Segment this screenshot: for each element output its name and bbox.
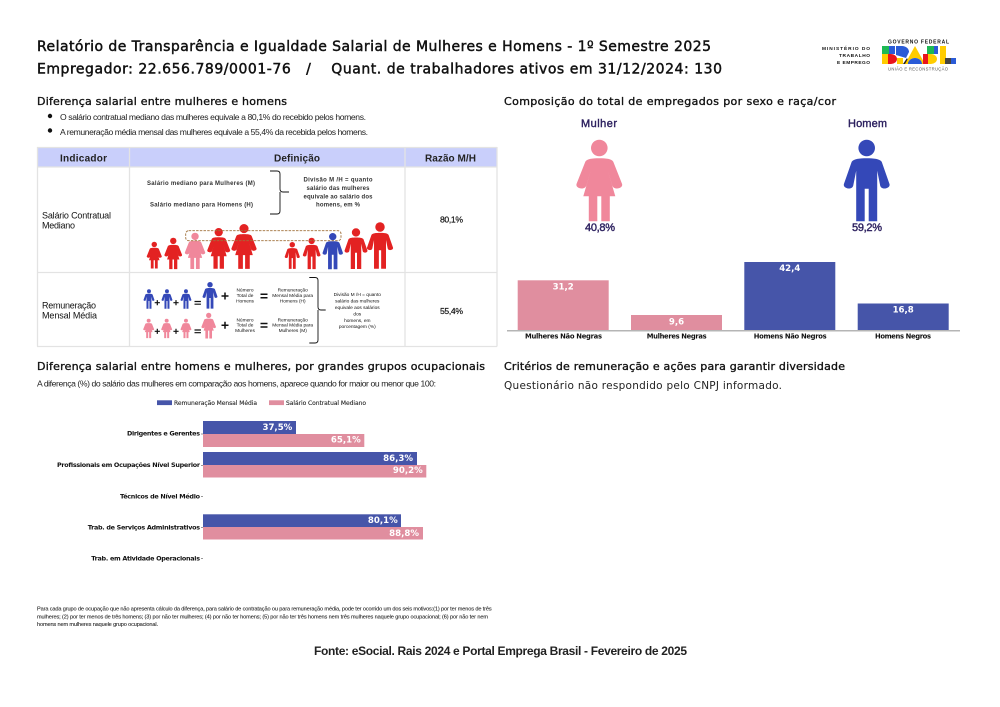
diagram: salário contratual mediano: salário das mulheres bbox=[306, 186, 370, 192]
table: Salário Contratual bbox=[42, 210, 111, 220]
footnote: Para cada grupo de ocupação que não apresenta cálculo da diferença, para salário de contratação ou para remuneração média, pode ter ocorrido um dos seis motivos:(1) por ter menos de três bbox=[37, 606, 492, 612]
heading: diferença salarial: Diferença salarial entre mulheres e homens bbox=[37, 95, 287, 108]
logo: ministério e governo federal: UNIÃO E RECONSTRUÇÃO bbox=[888, 66, 949, 72]
diagram: salário contratual mediano: Divisão M /H = quanto bbox=[304, 178, 373, 184]
bar chart: grupos ocupacionais: 65,1% bbox=[331, 435, 361, 445]
icon: homem 59,2% bbox=[844, 118, 890, 234]
diagram: remuneração mensal média: dos bbox=[353, 311, 362, 317]
logo: ministério e governo federal: MINISTÉRIO DO bbox=[822, 44, 870, 52]
diagram: remuneração mensal média: salário das mulheres bbox=[335, 298, 380, 304]
table: 80,1% bbox=[440, 214, 463, 224]
table: Mediano bbox=[42, 220, 75, 230]
text: explicação: A diferença (%) do salário das mulheres em comparação aos homens, aparece quando for maior ou menor que 100: bbox=[37, 378, 436, 388]
diagram: remuneração mensal média: Divisão M /H = quanto bbox=[334, 292, 381, 298]
bar chart: grupos ocupacionais: 88,8% bbox=[389, 529, 419, 539]
bar chart: sexo e raça/cor: Homens Negros bbox=[875, 332, 931, 340]
diagram: remuneração mensal média: homens, em bbox=[344, 318, 371, 324]
diagram: remuneração mensal média: porcentagem (%) bbox=[339, 324, 376, 330]
bar chart: grupos ocupacionais: Trab. em Atividade Operacionais bbox=[91, 554, 200, 562]
diagram: remuneração mensal média: Mulheres bbox=[235, 328, 255, 334]
table: Mensal Média bbox=[42, 311, 97, 321]
logo: ministério e governo federal bbox=[822, 40, 956, 72]
diagram: salário contratual mediano: equivale ao salário dos bbox=[304, 194, 373, 200]
diagram: remuneração mensal média: Total de bbox=[237, 323, 254, 329]
title: Relatório de Transparência e Igualdade Salarial de Mulheres e Homens - 1º Semestre 2025 bbox=[37, 39, 711, 55]
panel: diferença salarial entre mulheres e homens bbox=[37, 95, 497, 346]
icon: mulher 40,8%: Mulher bbox=[581, 118, 617, 130]
bullet list: A remuneração média mensal das mulheres equivale a 55,4% da recebida pelos homens. bbox=[60, 127, 368, 137]
bar chart: sexo e raça/cor: 42,4 bbox=[779, 264, 800, 274]
legend: Salário Contratual Mediano bbox=[286, 400, 366, 407]
table: Indicador bbox=[60, 154, 107, 164]
logo: ministério e governo federal: TRABALHO bbox=[839, 53, 870, 59]
bar chart: grupos ocupacionais: 86,3% bbox=[383, 454, 413, 464]
diagram: remuneração mensal média: Remuneração bbox=[278, 317, 308, 323]
heading: composição: Composição do total de empregados por sexo e raça/cor bbox=[504, 95, 836, 108]
bar chart: grupos ocupacionais: Técnicos de Nível Médio bbox=[120, 492, 201, 500]
source: Fonte: eSocial. Rais 2024 e Portal Emprega Brasil - Fevereiro de 2025 bbox=[314, 644, 687, 658]
title bbox=[37, 39, 722, 78]
icon: homem 59,2%: 59,2% bbox=[852, 222, 882, 234]
bullet list: O salário contratual mediano das mulheres equivale a 80,1% do recebido pelos homens. bbox=[60, 112, 366, 122]
legend bbox=[157, 400, 366, 407]
bar chart: grupos ocupacionais: 37,5% bbox=[262, 423, 293, 433]
footnote: homens nem mulheres naquele grupo ocupacional. bbox=[37, 622, 158, 628]
table: 55,4% bbox=[440, 306, 463, 316]
heading: critérios: Critérios de remuneração e ações para garantir diversidade bbox=[504, 360, 845, 373]
table: Definição bbox=[274, 154, 320, 164]
table bbox=[37, 147, 497, 346]
panel: composição do total de empregados bbox=[504, 95, 960, 340]
bar chart: sexo e raça/cor: 9,6 bbox=[669, 317, 684, 327]
text: questionário: Questionário não respondido pelo CNPJ informado. bbox=[504, 380, 782, 392]
bar chart: sexo e raça/cor: 16,8 bbox=[893, 306, 914, 316]
icon: mulher 40,8%: 40,8% bbox=[585, 222, 615, 234]
diagram: remuneração mensal média: Remuneração bbox=[278, 287, 308, 293]
diagram: remuneração mensal média: Mensal Média para bbox=[272, 323, 313, 329]
diagram: remuneração mensal média: Mensal Média para bbox=[272, 293, 313, 299]
bar chart: grupos ocupacionais: Trab. de Serviços Administrativos bbox=[88, 523, 200, 531]
bullet list bbox=[48, 112, 368, 137]
panel: critérios de remuneração bbox=[504, 360, 845, 392]
icon: homem 59,2%: Homem bbox=[848, 118, 887, 130]
bar chart: grupos ocupacionais: Profissionais em Ocupações Nível Superior bbox=[57, 461, 201, 469]
table: Razão M/H bbox=[425, 154, 476, 164]
diagram: remuneração mensal média: equivale aos salários bbox=[335, 305, 380, 311]
logo: ministério e governo federal: E EMPREGO bbox=[837, 60, 870, 66]
table: Remuneração bbox=[42, 300, 96, 310]
legend: Remuneração Mensal Média bbox=[174, 400, 257, 407]
heading: grupos ocupacionais: Diferença salarial entre homens e mulheres, por grandes grupos ocupacionais bbox=[37, 360, 485, 373]
diagram: remuneração mensal média: Mulheres (M) bbox=[279, 328, 307, 334]
diagram: remuneração mensal média: Total de bbox=[237, 293, 254, 299]
diagram: remuneração mensal média: Número bbox=[236, 317, 254, 323]
title: Empregador: 22.656.789/0001-76 / Quant. de trabalhadores ativos em 31/12/2024: 130 bbox=[37, 62, 722, 78]
icon: mulher 40,8% bbox=[576, 118, 622, 234]
bar chart: sexo e raça/cor bbox=[507, 262, 960, 340]
bar chart: grupos ocupacionais: Dirigentes e Gerentes bbox=[127, 430, 200, 438]
diagram: salário contratual mediano: homens, em % bbox=[316, 203, 361, 209]
footnote: mulheres; (2) por ter menos de três homens; (3) por não ter mulheres; (4) por não ter homens; (5) por não ter três homens nem três mulheres naquele grupo ocupacional; (6) por não ter nem bbox=[37, 614, 488, 620]
diagram: salário contratual mediano: Salário mediano para Homens (H) bbox=[150, 203, 253, 209]
bar chart: sexo e raça/cor: Mulheres Não Negras bbox=[525, 332, 602, 340]
bar chart: grupos ocupacionais: 80,1% bbox=[368, 516, 398, 526]
diagram: remuneração mensal média bbox=[143, 278, 381, 343]
panel: grupos ocupacionais bbox=[37, 360, 492, 628]
bar chart: grupos ocupacionais: 90,2% bbox=[393, 466, 423, 476]
bar chart: sexo e raça/cor: Homens Não Negros bbox=[754, 332, 827, 340]
bar chart: sexo e raça/cor: Mulheres Negras bbox=[647, 332, 707, 340]
diagram: salário contratual mediano: Salário mediano para Mulheres (M) bbox=[147, 181, 255, 187]
diagram: remuneração mensal média: Homens bbox=[236, 298, 255, 304]
logo: ministério e governo federal: GOVERNO FEDERAL bbox=[888, 40, 949, 46]
diagram: remuneração mensal média: Homens (H) bbox=[280, 298, 306, 304]
footnote bbox=[37, 606, 492, 628]
bar chart: grupos ocupacionais bbox=[57, 421, 426, 562]
bar chart: sexo e raça/cor: 31,2 bbox=[553, 282, 574, 292]
diagram: remuneração mensal média: Número bbox=[236, 287, 254, 293]
diagram: salário contratual mediano bbox=[147, 171, 393, 269]
